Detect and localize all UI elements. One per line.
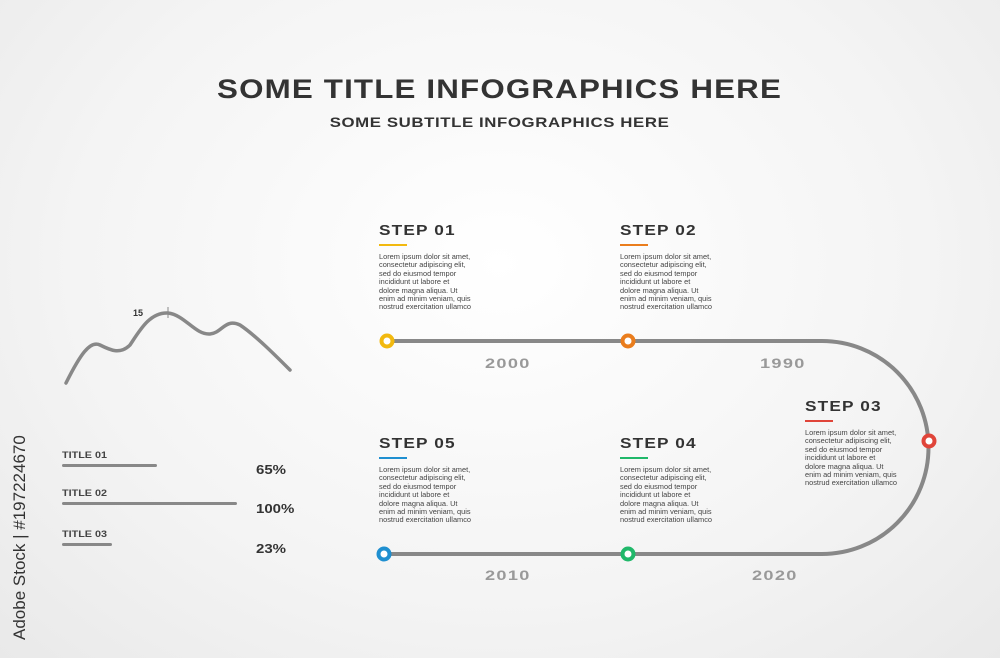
bar 2: TITLE 02 <box>62 488 107 498</box>
step 01: consectetur adipiscing elit, <box>379 260 466 269</box>
step 02 <box>620 222 712 311</box>
title: SOME TITLE INFOGRAPHICS HERE <box>218 74 782 104</box>
bar 3 <box>62 529 112 546</box>
step 05: consectetur adipiscing elit, <box>379 473 466 482</box>
step 02: incididunt ut labore et <box>620 277 690 286</box>
step 05: nostrud exercitation ullamco <box>379 515 471 524</box>
bar 1: TITLE 01 <box>62 450 107 460</box>
bar list: 23% <box>256 542 286 556</box>
step 03: STEP 03 <box>805 398 882 415</box>
step 04 <box>620 435 712 524</box>
step 04: incididunt ut labore et <box>620 490 690 499</box>
step 03: consectetur adipiscing elit, <box>805 436 892 445</box>
step 04: STEP 04 <box>620 435 697 452</box>
bar list <box>62 450 294 556</box>
step 04: sed do eiusmod tempor <box>620 482 697 491</box>
step 02: STEP 02 <box>620 222 697 239</box>
step 01: Lorem ipsum dolor sit amet, <box>379 252 470 261</box>
step 05: STEP 05 <box>379 435 456 452</box>
bar 2 <box>62 488 237 505</box>
subtitle: SOME SUBTITLE INFOGRAPHICS HERE <box>330 114 670 130</box>
step 05: Lorem ipsum dolor sit amet, <box>379 465 470 474</box>
step 03: incididunt ut labore et <box>805 453 875 462</box>
step 04: dolore magna aliqua. Ut <box>620 499 698 508</box>
step 02: Lorem ipsum dolor sit amet, <box>620 252 711 261</box>
step 03 <box>805 398 897 487</box>
step 03: dolore magna aliqua. Ut <box>805 462 883 471</box>
step 01: sed do eiusmod tempor <box>379 269 456 278</box>
step 03: Lorem ipsum dolor sit amet, <box>805 428 896 437</box>
bar 3: TITLE 03 <box>62 529 107 539</box>
step 05: incididunt ut labore et <box>379 490 449 499</box>
wave chart: 15 <box>133 308 143 318</box>
bar list: 100% <box>256 502 294 516</box>
step 04: enim ad minim veniam, quis <box>620 507 712 516</box>
year 1990: 1990 <box>760 355 806 371</box>
step 05: enim ad minim veniam, quis <box>379 507 471 516</box>
step 04: nostrud exercitation ullamco <box>620 515 712 524</box>
step 03: nostrud exercitation ullamco <box>805 478 897 487</box>
step 02: enim ad minim veniam, quis <box>620 294 712 303</box>
step 01: dolore magna aliqua. Ut <box>379 286 457 295</box>
step 05: sed do eiusmod tempor <box>379 482 456 491</box>
step 01: enim ad minim veniam, quis <box>379 294 471 303</box>
step 03: enim ad minim veniam, quis <box>805 470 897 479</box>
year 2010: 2010 <box>485 567 531 583</box>
step 05 <box>379 435 471 524</box>
watermark side text: Adobe Stock | #197224670 <box>10 435 29 640</box>
step 01: STEP 01 <box>379 222 456 239</box>
step 01: nostrud exercitation ullamco <box>379 302 471 311</box>
bar list: 65% <box>256 463 286 477</box>
step 02: sed do eiusmod tempor <box>620 269 697 278</box>
step 04: consectetur adipiscing elit, <box>620 473 707 482</box>
year 2020: 2020 <box>752 567 798 583</box>
step 01: incididunt ut labore et <box>379 277 449 286</box>
step 05: dolore magna aliqua. Ut <box>379 499 457 508</box>
step 02: dolore magna aliqua. Ut <box>620 286 698 295</box>
wave chart <box>66 307 290 383</box>
year 2000: 2000 <box>485 355 531 371</box>
bar 1 <box>62 450 157 467</box>
step 02: consectetur adipiscing elit, <box>620 260 707 269</box>
step 02: nostrud exercitation ullamco <box>620 302 712 311</box>
step 04: Lorem ipsum dolor sit amet, <box>620 465 711 474</box>
step 03: sed do eiusmod tempor <box>805 445 882 454</box>
step 01 <box>379 222 471 311</box>
